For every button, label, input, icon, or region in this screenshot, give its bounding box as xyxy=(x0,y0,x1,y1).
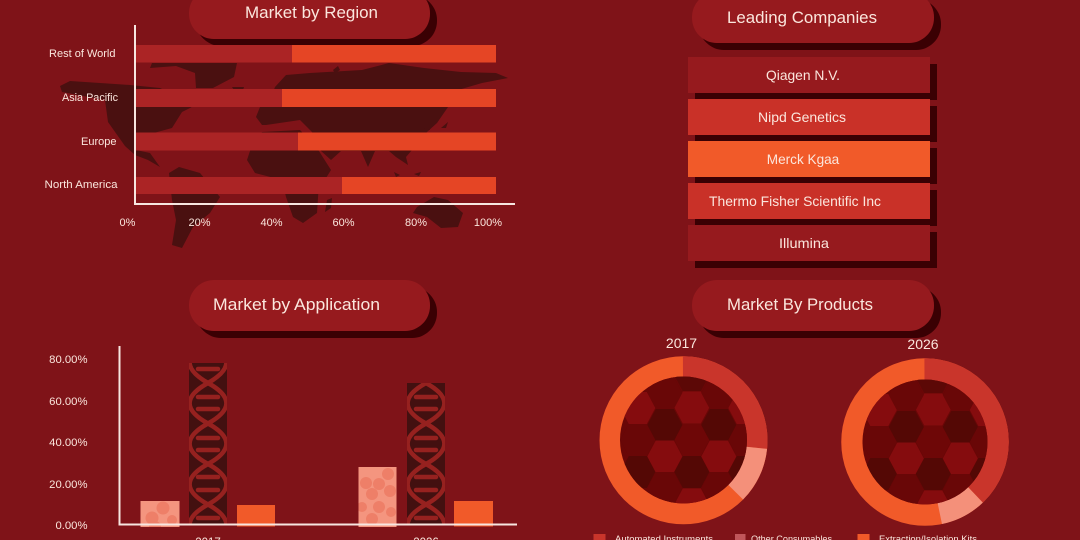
row labels: Europe xyxy=(81,136,116,148)
heading pill: market by region xyxy=(189,0,437,46)
heading pill: market by region: Market by Region xyxy=(245,3,378,22)
panel: market by application xyxy=(49,280,517,540)
heading pill: leading companies xyxy=(692,0,941,50)
company: merck kgaa: Merck Kgaa xyxy=(767,151,839,167)
donut: 2017 xyxy=(610,359,763,520)
row labels: Asia Pacific xyxy=(62,92,118,104)
company: thermo fisher: Thermo Fisher Scientific Inc xyxy=(709,193,881,209)
stacked bar: asia pacific xyxy=(136,89,496,107)
y axis labels: 0.00% xyxy=(55,520,88,532)
year label 2026: 2026 xyxy=(907,336,939,352)
legend xyxy=(594,534,977,540)
row labels: Rest of World xyxy=(49,48,116,60)
axis tick labels xyxy=(120,217,502,229)
bar: 2017 orange xyxy=(237,505,275,526)
chart axes xyxy=(120,346,517,524)
axis tick labels: 100% xyxy=(474,217,502,229)
axis tick labels: 60% xyxy=(332,217,355,229)
company: nipd genetics xyxy=(688,99,937,142)
row labels xyxy=(44,48,118,191)
bar: 2026 light xyxy=(357,467,396,527)
stacked bar: rest of world xyxy=(136,45,496,62)
company: thermo fisher xyxy=(688,183,937,226)
panel: leading companies xyxy=(688,0,941,268)
chart axes xyxy=(135,25,515,204)
heading pill: leading companies: Leading Companies xyxy=(727,8,877,27)
axis tick labels: 0% xyxy=(120,217,136,229)
world map xyxy=(60,63,508,248)
heading pill: market by products: Market By Products xyxy=(727,295,873,314)
company: illumina: Illumina xyxy=(779,235,829,251)
y axis labels: 80.00% xyxy=(49,354,88,366)
bar: 2026 dna xyxy=(407,383,445,524)
axis tick labels: 80% xyxy=(405,217,427,229)
stacked bar: europe xyxy=(136,132,496,150)
panel: market by products xyxy=(594,280,1005,540)
donut: 2026 xyxy=(852,361,1005,522)
y axis labels xyxy=(49,354,88,532)
y axis labels: 20.00% xyxy=(49,479,88,491)
bar: 2017 light xyxy=(140,501,180,527)
y axis labels: 40.00% xyxy=(49,437,88,449)
bar: 2017 dna xyxy=(189,363,227,524)
company: nipd genetics: Nipd Genetics xyxy=(758,109,846,125)
axis tick labels: 40% xyxy=(260,217,283,229)
axis tick labels: 20% xyxy=(188,217,211,229)
company: illumina xyxy=(688,225,937,268)
company: qiagen: Qiagen N.V. xyxy=(766,67,840,83)
heading pill: market by products xyxy=(692,280,941,338)
bar: 2026 orange xyxy=(454,501,493,526)
year label 2017: 2017 xyxy=(666,335,697,351)
category labels xyxy=(195,537,439,540)
company: merck kgaa xyxy=(688,141,937,184)
panel: market by region xyxy=(44,0,515,248)
company: qiagen xyxy=(688,57,937,100)
y axis labels: 60.00% xyxy=(49,396,88,408)
row labels: North America xyxy=(44,179,118,191)
heading pill: market by application: Market by Application xyxy=(213,295,380,314)
stacked bar: north america xyxy=(136,177,496,194)
heading pill: market by application xyxy=(189,280,437,338)
